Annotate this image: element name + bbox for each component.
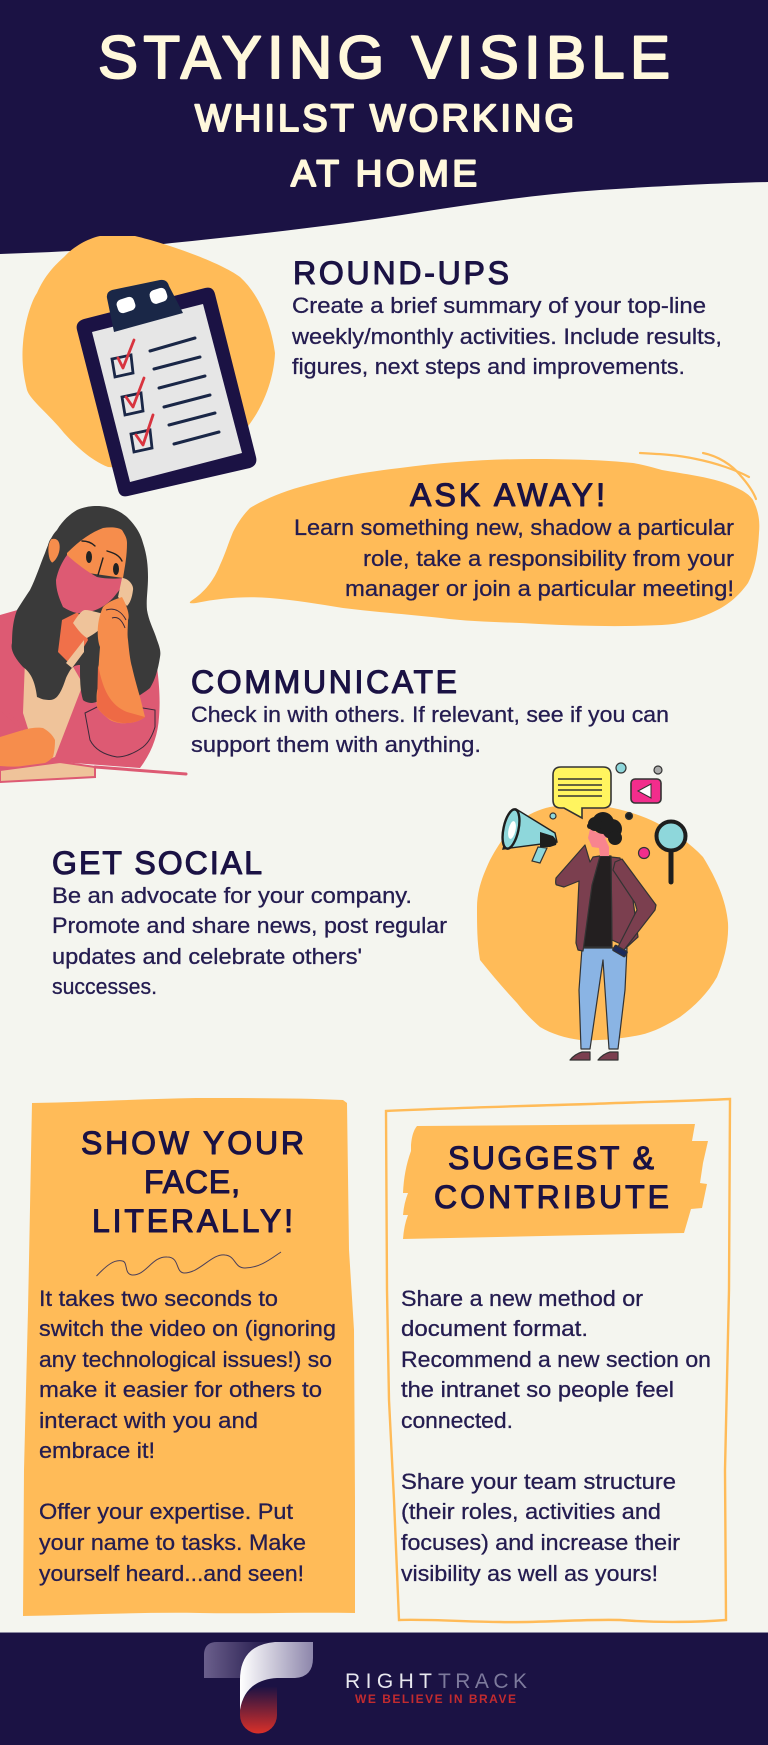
shirt — [23, 640, 83, 762]
heading: SHOW YOUR — [81, 1125, 304, 1161]
body text: support them with anything. — [191, 732, 481, 757]
heading — [81, 1125, 304, 1239]
paper and desk edge — [0, 762, 186, 782]
orange blob — [477, 804, 728, 1040]
body text: updates and celebrate others' — [52, 944, 362, 969]
body text: Share your team structure — [401, 1469, 676, 1494]
speech bubble shape — [190, 459, 759, 626]
megaphone — [500, 808, 557, 863]
body text: Recommend a new section on — [401, 1347, 711, 1372]
orange card — [23, 1098, 355, 1616]
heading — [434, 1140, 669, 1215]
body text: successes. — [52, 974, 157, 999]
body text: visibility as well as yours! — [401, 1561, 658, 1586]
outlined card — [386, 1099, 730, 1622]
title line 1: STAYING VISIBLE — [98, 24, 670, 91]
floating dots — [550, 763, 662, 858]
body text: Offer your expertise. Put — [39, 1499, 293, 1524]
icon: orange blob — [22, 236, 275, 470]
body text: document format. — [401, 1316, 588, 1341]
eyes — [82, 541, 122, 575]
panel: suggest and contribute — [386, 1099, 730, 1622]
body text: manager or join a particular meeting! — [345, 576, 734, 601]
footer band — [0, 1632, 768, 1745]
heading: LITERALLY! — [92, 1203, 293, 1239]
magnifying glass — [656, 822, 686, 882]
jacket right panel — [611, 857, 638, 947]
shoes — [570, 1052, 618, 1060]
icon: clipboard — [77, 280, 256, 496]
heading: SUGGEST & — [448, 1140, 654, 1176]
body text — [401, 1286, 711, 1586]
body text — [39, 1286, 336, 1586]
body text: figures, next steps and improvements. — [292, 354, 685, 379]
panel: ask away speech bubble — [190, 453, 759, 626]
logo wordmark — [345, 1670, 527, 1693]
body text: the intranet so people feel — [401, 1377, 674, 1402]
jacket left panel and raised arm — [556, 845, 600, 951]
logo wordmark: RIGHT — [345, 1670, 432, 1693]
swoosh marks — [640, 453, 756, 499]
forearm arm on hip — [613, 859, 656, 950]
mask — [56, 555, 123, 613]
panel: show your face — [23, 1098, 355, 1616]
body text: embrace it! — [39, 1438, 155, 1463]
body text: yourself heard...and seen! — [39, 1561, 304, 1586]
squiggle — [96, 1252, 281, 1276]
jeans — [579, 948, 627, 1049]
body text: Create a brief summary of your top-line — [292, 293, 706, 318]
body text — [294, 515, 734, 601]
body text — [52, 883, 447, 999]
body text — [291, 293, 722, 379]
illustration: man with megaphone — [477, 763, 728, 1060]
body text: any technological issues!) so — [39, 1347, 332, 1372]
person — [556, 812, 656, 1060]
shirt — [583, 856, 612, 947]
jacket — [0, 607, 160, 772]
rolled sleeve — [85, 707, 155, 757]
collar — [66, 640, 84, 668]
video icon — [631, 779, 661, 803]
body text: role, take a responsibility from your — [363, 546, 734, 571]
body text: switch the video on (ignoring — [39, 1316, 336, 1341]
arm shade — [97, 665, 145, 723]
phone receiver — [73, 578, 133, 638]
ear — [48, 538, 60, 563]
body text: It takes two seconds to — [39, 1286, 278, 1311]
hair — [587, 812, 622, 845]
pen — [0, 708, 24, 729]
body text: focuses) and increase their — [401, 1530, 680, 1555]
speech bubble icon — [553, 767, 611, 818]
body text: Promote and share news, post regular — [52, 913, 447, 938]
brush banner — [403, 1124, 708, 1239]
heading: CONTRIBUTE — [434, 1179, 669, 1215]
body text: connected. — [401, 1408, 513, 1433]
heading: FACE, — [144, 1164, 240, 1200]
pupils — [86, 551, 119, 575]
face — [67, 527, 127, 578]
body text: Learn something new, shadow a particular — [294, 515, 734, 540]
heading: ASK AWAY! — [410, 477, 605, 513]
panel: get social — [52, 845, 447, 999]
phone — [612, 945, 628, 957]
panel: communicate — [191, 664, 669, 757]
logo mark — [204, 1642, 313, 1734]
body text: (their roles, activities and — [401, 1499, 661, 1524]
panel: round-ups — [22, 236, 722, 496]
title — [98, 24, 670, 194]
body text: Check in with others. If relevant, see if you can — [191, 702, 669, 727]
body text: weekly/monthly activities. Include results, — [291, 324, 722, 349]
arm and hand — [97, 597, 145, 723]
logo tagline: WE BELIEVE IN BRAVE — [355, 1692, 516, 1706]
left hand — [0, 728, 55, 767]
body text: Be an advocate for your company. — [52, 883, 412, 908]
title line 3: AT HOME — [291, 153, 477, 194]
body text: make it easier for others to — [39, 1377, 322, 1402]
header band — [0, 0, 768, 254]
hair — [12, 506, 160, 703]
logo — [204, 1642, 527, 1734]
illustration: woman on phone — [0, 506, 186, 782]
finger lines — [106, 609, 126, 628]
neck — [58, 612, 88, 662]
body text: interact with you and — [39, 1408, 258, 1433]
body text — [191, 702, 669, 757]
title line 2: WHILST WORKING — [195, 98, 574, 140]
logo wordmark: TRACK — [438, 1670, 527, 1693]
heading: ROUND-UPS — [293, 255, 509, 291]
neck and face — [588, 829, 609, 856]
body text: your name to tasks. Make — [39, 1530, 306, 1555]
heading: GET SOCIAL — [52, 845, 262, 881]
heading: COMMUNICATE — [191, 664, 457, 700]
body text: Share a new method or — [401, 1286, 643, 1311]
